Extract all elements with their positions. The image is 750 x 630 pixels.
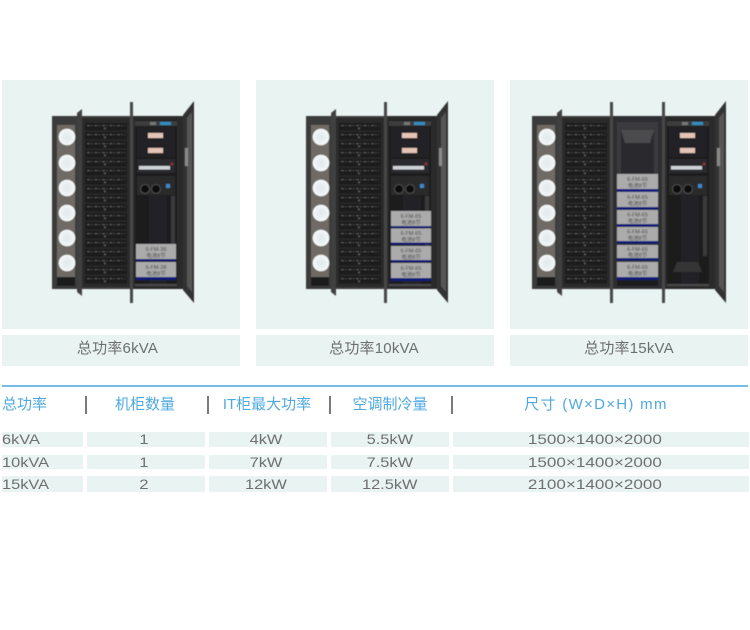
battery pack 4 [391,263,431,281]
table row: 15kVA [2,476,749,492]
battery stack: 电池8节 [628,200,648,208]
table row: 10kVA: 10kVA [2,454,49,470]
open floor of power bay [673,262,702,272]
cabinet: 6kVA [52,101,194,303]
battery pack 1: 电池8节 [401,218,421,226]
table row: 10kVA: 1500×1400×2000 [528,454,662,470]
battery pack 1: 6-FM-38 [146,247,166,253]
table header: dimensions: 尺寸 (W×D×H) mm [524,396,668,413]
battery stack: 6-FM-65 [627,177,648,183]
caption: 10kVA: 总功率10kVA [329,340,419,357]
cabinet: 10kVA [306,101,448,303]
caption: 6kVA [2,335,240,366]
battery pack 4: 6-FM-65 [401,266,421,272]
battery stack: 电池8节 [628,251,648,259]
battery pack 3: 6-FM-65 [401,248,421,254]
table header: cabinet count: 机柜数量 [115,396,175,413]
table row: 6kVA: 1 [139,431,148,447]
table row: 15kVA: 12kW [245,476,286,492]
table row: 15kVA: 2100×1400×2000 [528,476,662,492]
panel: 15kVA background [510,80,748,329]
caption: 6kVA: 总功率6kVA [77,340,158,357]
battery pack 2: 电池8节 [401,236,421,244]
battery pack 2: 6-FM-38 [146,265,166,271]
battery bay [613,116,663,289]
table header: cooling capacity: 空调制冷量 [352,396,428,413]
battery pack 2: 6-FM-65 [401,231,421,237]
battery stack: 电池8节 [628,270,648,278]
table header: IT max power: IT柜最大功率 [223,396,311,413]
battery stack: 6-FM-65 [627,230,648,236]
cabinet: 15kVA [532,101,726,303]
table row: 6kVA: 6kVA [2,431,40,447]
battery stack: 6-FM-65 [627,212,648,218]
table row: 6kVA: 5.5kW [367,431,413,447]
panel: 6kVA background [2,80,240,329]
table row: 15kVA: 2 [139,476,148,492]
table row: 10kVA: 7.5kW [367,454,413,470]
battery pack 2: 电池8节 [146,270,166,278]
caption: 15kVA [510,335,748,366]
battery stack [617,174,658,280]
battery pack 1: 6-FM-65 [401,214,421,220]
battery stack: 6-FM-65 [627,195,648,201]
battery pack 2 [136,262,176,280]
battery stack: 电池8节 [628,182,648,190]
battery pack 3: 电池8节 [401,253,421,261]
battery pack 2 [391,228,431,244]
table top rule [2,385,748,387]
table row: 15kVA: 12.5kW [362,476,418,492]
battery stack: 电池8节 [628,217,648,225]
battery stack: 6-FM-65 [627,247,648,253]
battery pack 4: 电池8节 [401,270,421,278]
battery pack 1 [391,211,431,228]
battery pack 3 [391,246,431,262]
caption: 10kVA [256,335,494,366]
table row: 10kVA: 1 [139,454,148,470]
table row: 15kVA: 15kVA [2,476,49,492]
table row: 6kVA: 1500×1400×2000 [528,431,662,447]
panel: 10kVA background [256,80,494,329]
table row: 6kVA: 4kW [249,431,282,447]
table row: 6kVA [2,431,749,447]
table row: 10kVA: 7kW [249,454,282,470]
battery pack 1 [136,244,176,261]
table header: total power: 总功率 [2,396,47,413]
table row: 10kVA [2,454,749,470]
battery stack: 6-FM-65 [627,265,648,271]
caption: 15kVA: 总功率15kVA [584,340,674,357]
battery pack 1: 电池8节 [146,252,166,260]
battery stack: 电池8节 [628,234,648,242]
